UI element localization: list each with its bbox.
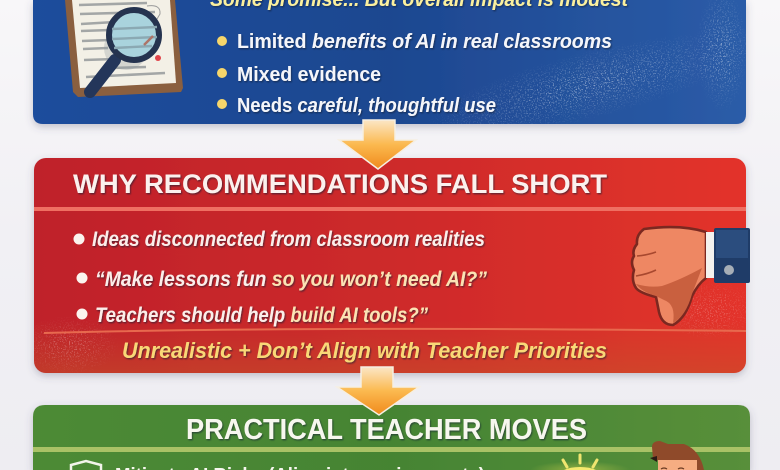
bullet list: findings: [217, 31, 612, 117]
bullet list: flawed recommendations: [74, 228, 487, 327]
bullet list: findings: Limited benefits of AI in real classrooms: [237, 31, 612, 53]
bullet list: findings: Needs careful, thoughtful use: [237, 95, 496, 117]
arrow: red to green: [337, 367, 419, 415]
icon: shield: [71, 461, 101, 470]
heading: PRACTICAL TEACHER MOVES: [186, 414, 587, 446]
panel: research findings: [33, 0, 746, 124]
arrow: blue to red: [339, 120, 416, 169]
icon: thumbs down: [632, 227, 750, 325]
bullet list: flawed recommendations: Teachers should help build AI tools?”: [95, 304, 428, 327]
conclusion: Unrealistic + Don’t Align with Teacher Priorities: [122, 338, 607, 363]
bullet list: findings: Mixed evidence: [237, 64, 381, 86]
heading: WHY RECOMMENDATIONS FALL SHORT: [73, 169, 608, 199]
bullet list: flawed recommendations: Ideas disconnected from classroom realities: [92, 228, 485, 251]
illustration: teacher: [650, 441, 704, 470]
icon: clipboard with magnifier: [65, 0, 183, 97]
panel: practical teacher moves: [33, 405, 750, 470]
bullet list: flawed recommendations: “Make lessons fun so you won’t need AI?”: [95, 268, 487, 291]
icon: light bulb: [530, 452, 630, 470]
panel: why recommendations fall short: [34, 158, 750, 373]
